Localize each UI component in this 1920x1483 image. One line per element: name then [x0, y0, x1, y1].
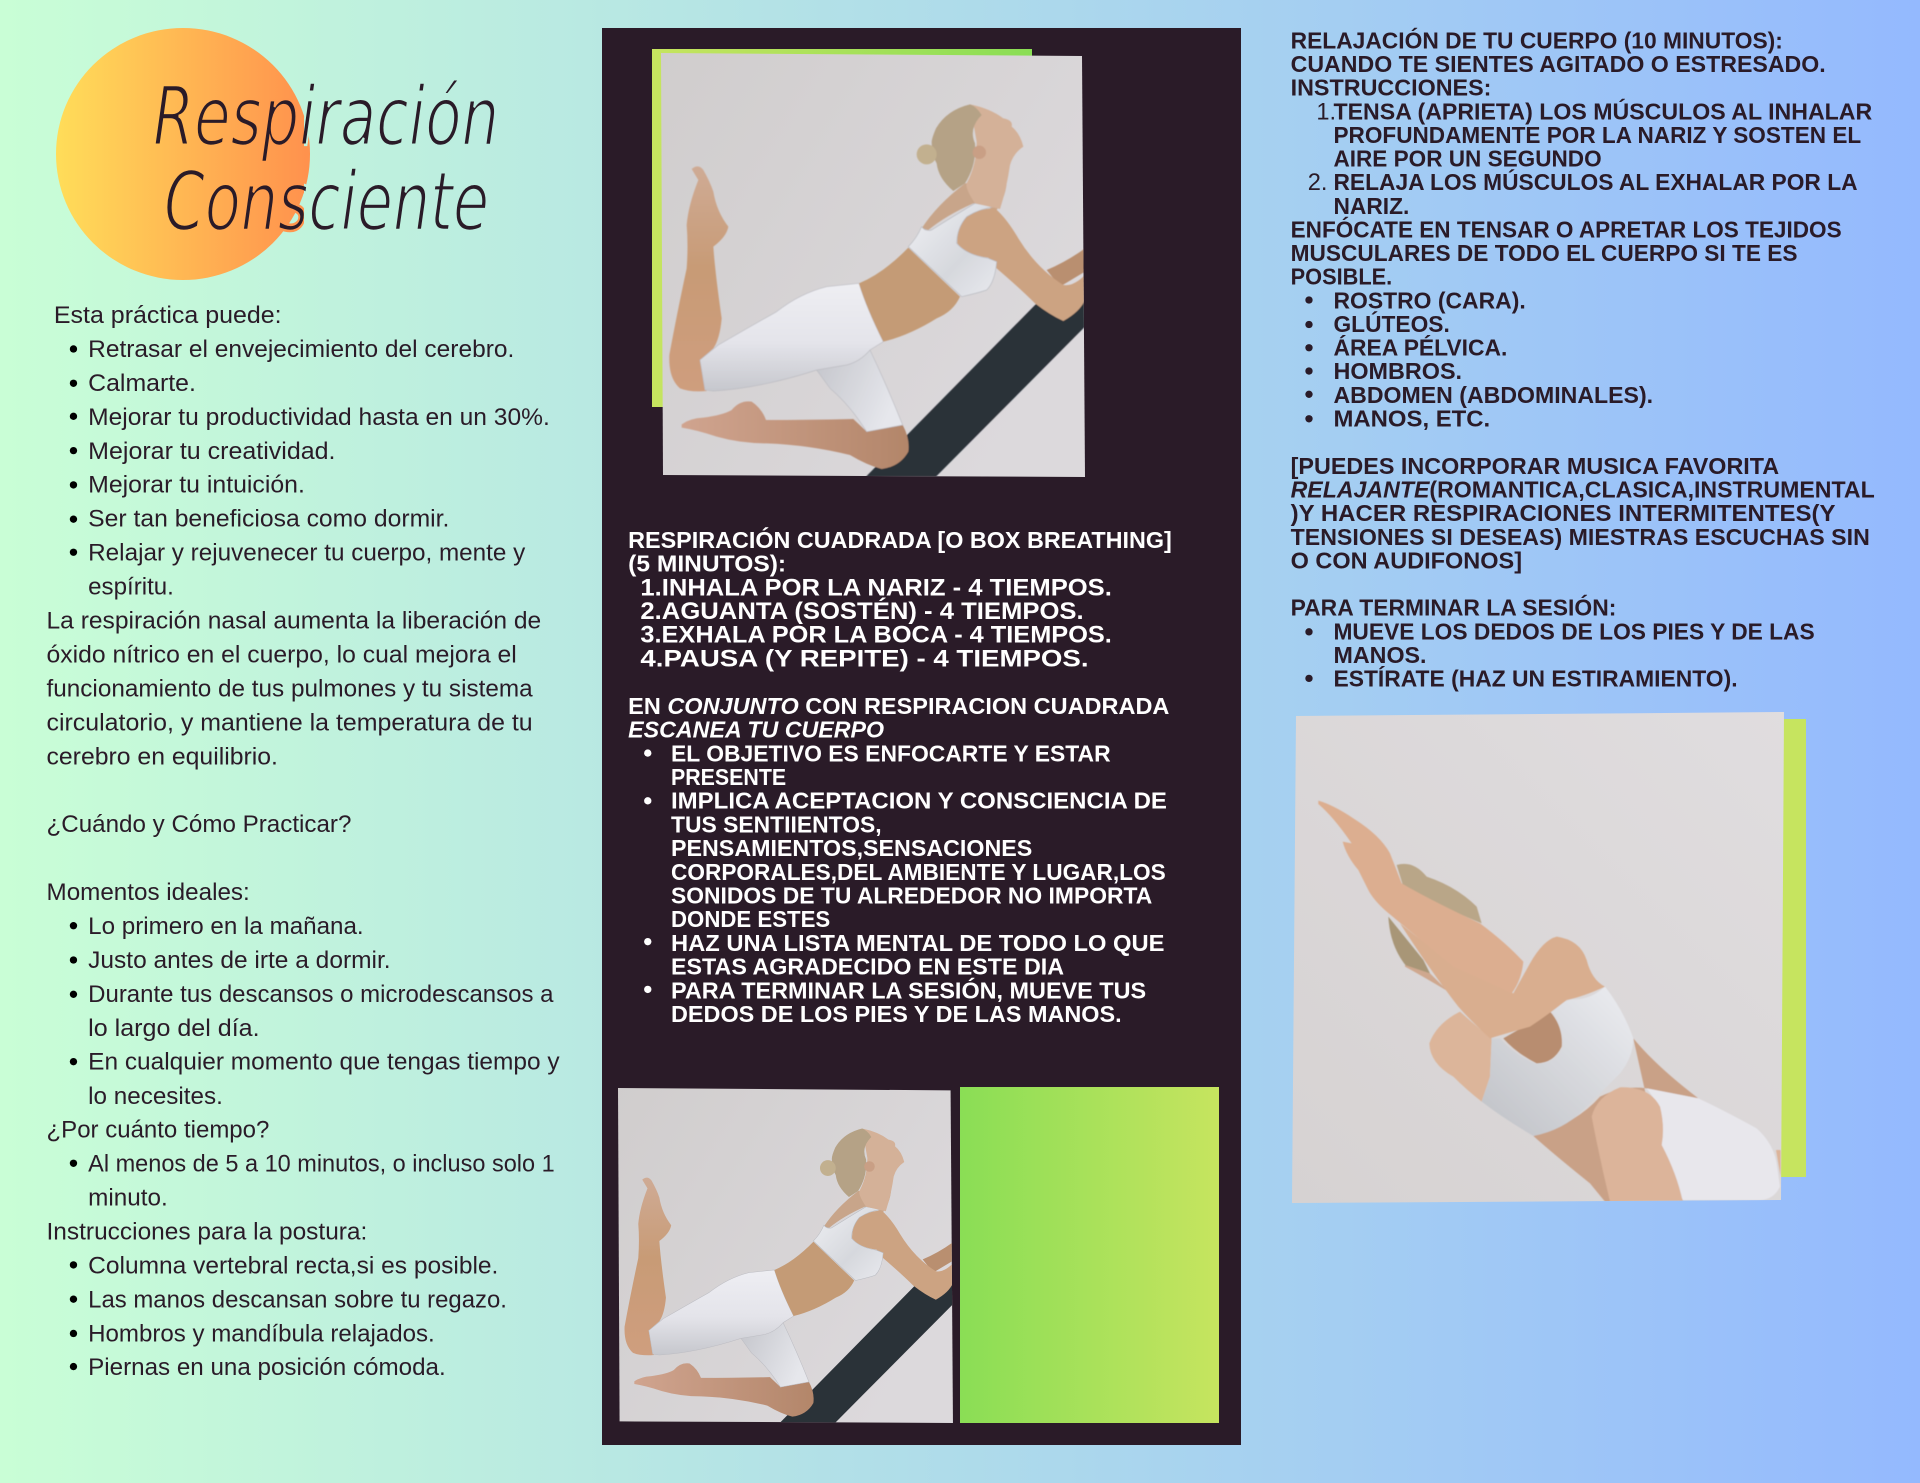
text block: muscle groups list: ROSTRO (CARA).: [1333, 287, 1526, 313]
text block: body scan: CORPORALES,DEL AMBIENTE Y LUGAR,LOS: [671, 859, 1166, 885]
text block: body relaxation instructions: INSTRUCCIONES:: [1291, 75, 1491, 101]
text block: posture instructions: [47, 1219, 507, 1381]
text block: body relaxation instructions: RELAJACIÓN DE TU CUERPO (10 MINUTOS):: [1291, 27, 1783, 53]
photo: woman stretching, small repeat: [613, 1086, 957, 1425]
text block: body relaxation instructions: AIRE POR UN SEGUNDO: [1333, 146, 1602, 172]
text block: music note: RELAJANTE(ROMANTICA,CLASICA,INSTRUMENTAL: [1291, 477, 1875, 503]
text block: box breathing steps: (5 MINUTOS):: [628, 551, 786, 577]
icon: orange gradient circle: [56, 28, 310, 280]
text block: duration: ¿Por cuánto tiempo?: [47, 1118, 269, 1144]
text block: ending the session: MUEVE LOS DEDOS DE LOS PIES Y DE LAS: [1333, 618, 1815, 644]
text block: posture instructions: Las manos descansan sobre tu regazo.: [88, 1287, 507, 1313]
text block: ideal moments list: Justo antes de irte a dormir.: [88, 948, 391, 974]
title: Consciente: [164, 155, 489, 250]
title: [153, 70, 499, 250]
text block: benefits list: Calmarte.: [88, 371, 196, 397]
text block: nasal breathing paragraph: cerebro en equilibrio.: [47, 744, 278, 770]
text block: ideal moments list: En cualquier momento que tengas tiempo y: [88, 1050, 560, 1076]
text block: nasal breathing paragraph: óxido nítrico en el cuerpo, lo cual mejora el: [47, 642, 517, 668]
text block: body scan: PRESENTE: [671, 764, 786, 790]
text block: muscle groups list: MANOS, ETC.: [1333, 405, 1490, 431]
text block: benefits list: [54, 303, 550, 601]
text block: body scan: PENSAMIENTOS,SENSACIONES: [671, 835, 1032, 861]
text block: ideal moments list: Momentos ideales:: [47, 880, 250, 906]
text block: box breathing steps: [628, 527, 1172, 672]
text block: benefits list: Mejorar tu creatividad.: [88, 439, 336, 465]
heading: when and how to practice: ¿Cuándo y Cómo Practicar?: [47, 812, 351, 838]
text block: muscle groups list: HOMBROS.: [1333, 358, 1462, 384]
text block: benefits list: Relajar y rejuvenecer tu cuerpo, mente y: [88, 541, 525, 567]
text block: body scan: SONIDOS DE TU ALREDEDOR NO IMPORTA: [671, 883, 1152, 909]
text block: body relaxation instructions: PROFUNDAMENTE POR LA NARIZ Y SOSTEN EL: [1333, 122, 1861, 148]
panel: green gradient block: [960, 1087, 1219, 1423]
text block: body scan: HAZ UNA LISTA MENTAL DE TODO LO QUE: [671, 930, 1164, 956]
text block: music note: [PUEDES INCORPORAR MUSICA FAVORITA: [1291, 453, 1779, 479]
text block: body relaxation instructions: 2.: [1308, 170, 1327, 196]
text block: duration: Al menos de 5 a 10 minutos, o incluso solo 1: [88, 1152, 555, 1178]
text block: ending the session: ESTÍRATE (HAZ UN ESTIRAMIENTO).: [1333, 666, 1738, 692]
text block: body relaxation instructions: NARIZ.: [1333, 193, 1409, 219]
text block: body scan: PARA TERMINAR LA SESIÓN, MUEVE TUS: [671, 977, 1146, 1003]
text block: body scan: IMPLICA ACEPTACION Y CONSCIENCIA DE: [671, 788, 1167, 814]
text block: ideal moments list: Lo primero en la mañana.: [88, 914, 364, 940]
photo: woman bending forward with crossed arms: [1285, 705, 1790, 1210]
text block: ideal moments list: lo largo del día.: [88, 1016, 260, 1042]
text block: muscle groups list: GLÚTEOS.: [1333, 311, 1450, 337]
text block: body scan: ESCANEA TU CUERPO: [628, 717, 884, 743]
text block: ending the session: MANOS.: [1333, 642, 1427, 668]
text block: muscle groups list: POSIBLE.: [1291, 264, 1392, 290]
text block: muscle groups list: ENFÓCATE EN TENSAR O APRETAR LOS TEJIDOS: [1291, 216, 1842, 242]
text block: body relaxation instructions: CUANDO TE SIENTES AGITADO O ESTRESADO.: [1291, 51, 1826, 77]
decorative green bar behind right photo: [1700, 719, 1806, 1177]
panel: dark centre column: [602, 28, 1241, 1445]
text block: body scan: ESTAS AGRADECIDO EN ESTE DIA: [671, 954, 1064, 980]
text block: benefits list: Mejorar tu intuición.: [88, 473, 305, 499]
text block: muscle groups list: [1291, 216, 1842, 431]
panel: left column body text: [47, 303, 560, 1381]
text block: benefits list: Retrasar el envejecimiento del cerebro.: [88, 337, 514, 363]
text block: body scan: EL OBJETIVO ES ENFOCARTE Y ESTAR: [671, 740, 1111, 766]
text block: music note: [1291, 453, 1875, 573]
text block: ending the session: PARA TERMINAR LA SESIÓN:: [1291, 595, 1616, 621]
text block: box breathing steps: RESPIRACIÓN CUADRADA [O BOX BREATHING]: [628, 527, 1172, 553]
text block: benefits list: espíritu.: [88, 575, 174, 601]
text block: body relaxation instructions: RELAJA LOS MÚSCULOS AL EXHALAR POR LA: [1333, 169, 1858, 195]
text block: body relaxation instructions: [1291, 27, 1872, 219]
text block: body scan: DONDE ESTES: [671, 906, 830, 932]
text block: posture instructions: Instrucciones para la postura:: [47, 1219, 367, 1245]
panel: centre text: [628, 527, 1172, 1027]
text block: box breathing steps: 2.AGUANTA (SOSTÉN) - 4 TIEMPOS.: [640, 597, 1084, 625]
text block: muscle groups list: MUSCULARES DE TODO EL CUERPO SI TE ES: [1291, 240, 1798, 266]
title: Respiración: [153, 70, 499, 165]
text block: music note: )Y HACER RESPIRACIONES INTERMITENTES(Y: [1291, 500, 1836, 526]
text block: box breathing steps: 1.INHALA POR LA NARIZ - 4 TIEMPOS.: [640, 574, 1112, 601]
text block: body scan: TUS SENTIIENTOS,: [671, 811, 882, 837]
text block: music note: TENSIONES SI DESEAS) MIESTRAS ESCUCHAS SIN: [1291, 524, 1870, 550]
text block: nasal breathing paragraph: funcionamiento de tus pulmones y tu sistema: [47, 676, 534, 702]
text block: music note: O CON AUDIFONOS]: [1291, 547, 1522, 573]
text block: nasal breathing paragraph: La respiración nasal aumenta la liberación de: [47, 609, 541, 635]
photo: woman stretching on mat: [655, 50, 1090, 480]
text block: posture instructions: Hombros y mandíbula relajados.: [88, 1321, 435, 1347]
panel: right column text: [1291, 27, 1875, 692]
text block: body relaxation instructions: TENSA (APRIETA) LOS MÚSCULOS AL INHALAR: [1333, 98, 1872, 124]
text block: ideal moments list: Durante tus descansos o microdescansos a: [88, 982, 554, 1008]
text block: body scan: EN CONJUNTO CON RESPIRACION CUADRADA: [628, 693, 1169, 719]
text block: body scan: [628, 693, 1169, 1027]
text block: ending the session: [1291, 595, 1815, 692]
text block: body scan: DEDOS DE LOS PIES Y DE LAS MANOS.: [671, 1001, 1122, 1027]
text block: benefits list: Esta práctica puede:: [54, 303, 282, 329]
text block: nasal breathing paragraph: circulatorio, y mantiene la temperatura de tu: [47, 710, 533, 736]
text block: benefits list: Ser tan beneficiosa como dormir.: [88, 507, 449, 533]
text block: posture instructions: Piernas en una posición cómoda.: [88, 1355, 446, 1381]
decorative green frame behind top photo: [652, 49, 1032, 407]
text block: posture instructions: Columna vertebral recta,si es posible.: [88, 1253, 498, 1279]
text block: box breathing steps: 3.EXHALA POR LA BOCA - 4 TIEMPOS.: [640, 622, 1112, 649]
text block: muscle groups list: ABDOMEN (ABDOMINALES).: [1333, 382, 1653, 408]
text block: benefits list: Mejorar tu productividad hasta en un 30%.: [88, 405, 550, 431]
text block: duration: minuto.: [88, 1186, 168, 1212]
text block: body relaxation instructions: 1.: [1316, 99, 1336, 125]
text block: nasal breathing paragraph: [47, 609, 541, 770]
text block: ideal moments list: lo necesites.: [88, 1084, 223, 1110]
text block: box breathing steps: 4.PAUSA (Y REPITE) - 4 TIEMPOS.: [640, 645, 1089, 672]
text block: muscle groups list: ÁREA PÉLVICA.: [1333, 335, 1507, 361]
text block: ideal moments list: [47, 880, 560, 1110]
text block: duration: [47, 1118, 555, 1212]
